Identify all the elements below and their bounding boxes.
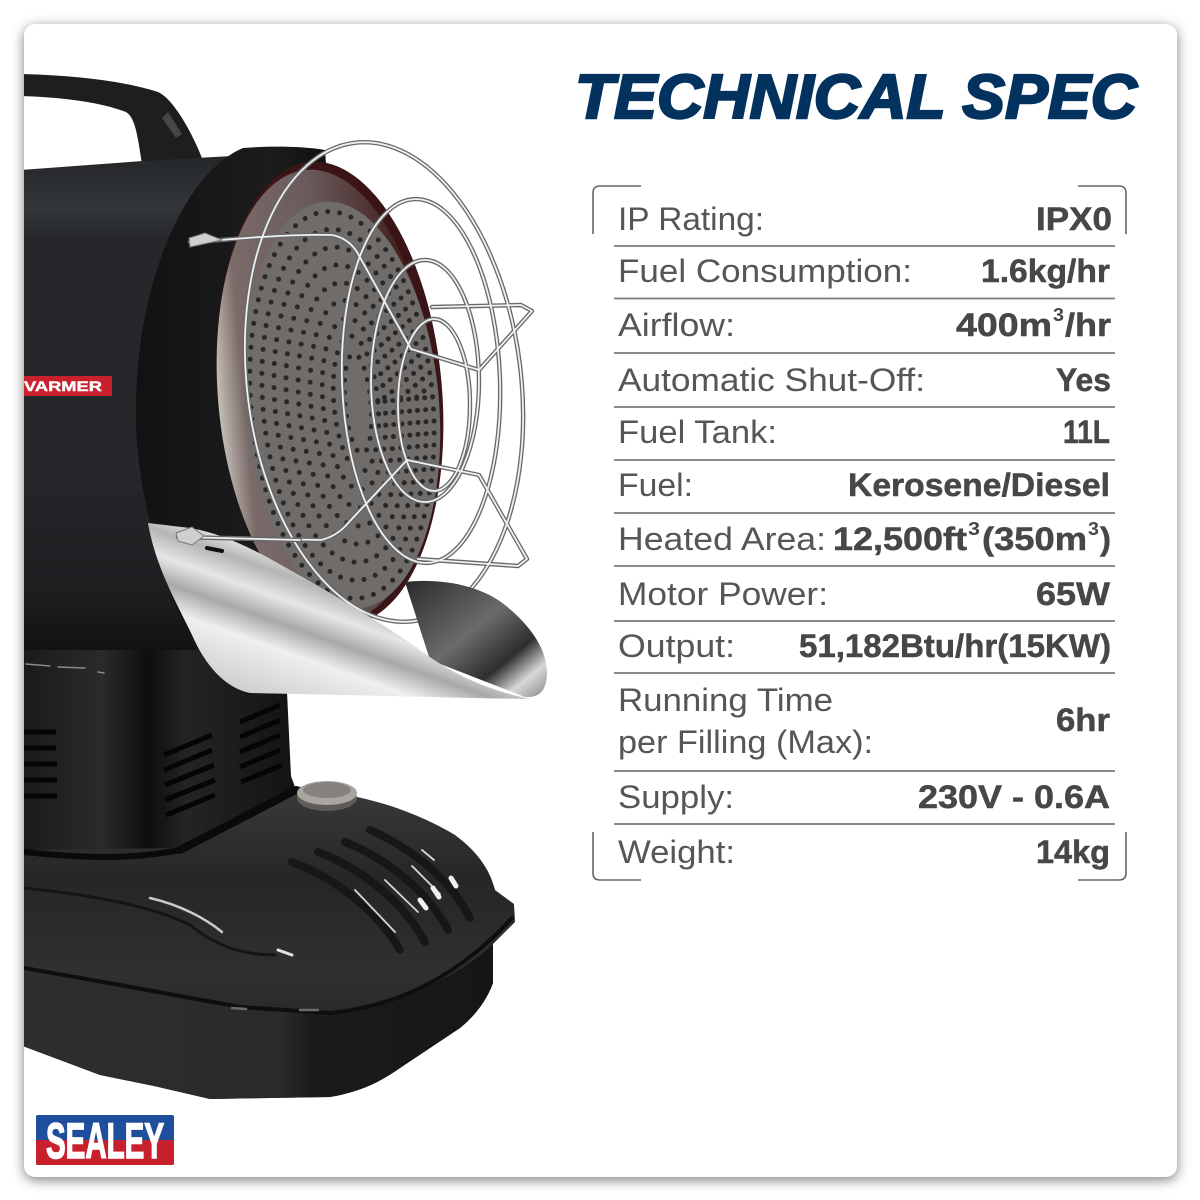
row: running time: Running Time bbox=[618, 682, 833, 718]
housing highlights bbox=[26, 664, 104, 673]
handle grip recess bbox=[162, 112, 182, 138]
row: output: 51,182Btu/hr(15KW) bbox=[799, 628, 1111, 664]
row: motor power: Motor Power: bbox=[618, 576, 828, 612]
table brackets bbox=[593, 186, 1126, 880]
motor vents bbox=[24, 705, 282, 815]
wire guard bbox=[188, 140, 534, 624]
row: airflow bbox=[618, 305, 1111, 343]
chrome shield bbox=[148, 523, 530, 699]
row: airflow: Airflow: bbox=[618, 307, 735, 343]
row: heated area bbox=[618, 519, 1111, 557]
upper guard clip bbox=[189, 233, 222, 247]
fuel tank bbox=[20, 786, 515, 1099]
spec table bbox=[618, 201, 1112, 870]
tank ribs bbox=[292, 830, 470, 950]
row: fuel consumption: Fuel Consumption: bbox=[618, 253, 912, 289]
row: weight bbox=[618, 834, 1110, 870]
row: supply: 230V - 0.6A bbox=[918, 779, 1110, 815]
row: heated area: ) bbox=[1100, 521, 1111, 557]
row: automatic shut-off: Yes bbox=[1056, 362, 1111, 398]
lower guard clip bbox=[176, 527, 204, 545]
row: motor power bbox=[618, 576, 1111, 612]
row: airflow: 400m bbox=[956, 307, 1052, 343]
row: fuel tank: Fuel Tank: bbox=[618, 414, 777, 450]
row: heated area: (350m bbox=[982, 521, 1087, 557]
row: weight: 14kg bbox=[1036, 834, 1110, 870]
row: heated area: 12,500ft bbox=[833, 521, 967, 557]
row: output: Output: bbox=[618, 628, 735, 664]
row: running time: 6hr bbox=[1056, 702, 1110, 738]
row: fuel tank: 11L bbox=[1063, 414, 1110, 450]
tank seam and highlights bbox=[24, 790, 512, 1013]
front band bbox=[136, 146, 326, 604]
row: IP rating bbox=[618, 201, 1112, 237]
product photo: heater illustration bbox=[20, 74, 549, 1099]
row: weight: Weight: bbox=[618, 834, 735, 870]
row: automatic shut-off bbox=[618, 362, 1111, 398]
tank lower shell bbox=[20, 944, 493, 1099]
row: supply: Supply: bbox=[618, 779, 734, 815]
row: heated area: 3 bbox=[1088, 519, 1099, 539]
row: IP rating: IPX0 bbox=[1036, 201, 1112, 237]
row: fuel consumption bbox=[618, 253, 1110, 289]
row: automatic shut-off: Automatic Shut-Off: bbox=[618, 362, 925, 398]
row: fuel bbox=[618, 467, 1110, 503]
row: airflow: 3 bbox=[1053, 305, 1064, 325]
row: motor power: 65W bbox=[1036, 576, 1111, 612]
logo: Sealey bbox=[36, 1113, 174, 1169]
logo: Sealey: SEALEY bbox=[46, 1113, 164, 1169]
lower heater housing bbox=[20, 650, 296, 850]
row: supply bbox=[618, 779, 1110, 815]
row: output bbox=[618, 628, 1111, 664]
heater handle bbox=[20, 74, 202, 164]
red brand label: VARMER bbox=[24, 378, 102, 394]
red brand label bbox=[24, 376, 112, 396]
row: fuel consumption: 1.6kg/hr bbox=[981, 253, 1110, 289]
row: heated area: 3 bbox=[968, 519, 980, 539]
row: IP rating: IP Rating: bbox=[618, 201, 764, 237]
row: running time bbox=[618, 682, 1110, 760]
row: fuel tank bbox=[618, 414, 1110, 450]
row: running time: per Filling (Max): bbox=[618, 724, 873, 760]
lower strut over shield bbox=[178, 537, 300, 551]
reflector disc bbox=[216, 162, 444, 618]
row: airflow: /hr bbox=[1065, 307, 1111, 343]
row: fuel: Kerosene/Diesel bbox=[848, 467, 1110, 503]
chrome shield inner bbox=[405, 581, 547, 697]
heater body bbox=[24, 156, 228, 650]
row: heated area: Heated Area: bbox=[618, 521, 826, 557]
title: TECHNICAL SPEC bbox=[575, 63, 1138, 132]
fuel cap bbox=[297, 781, 357, 811]
row: fuel: Fuel: bbox=[618, 467, 693, 503]
